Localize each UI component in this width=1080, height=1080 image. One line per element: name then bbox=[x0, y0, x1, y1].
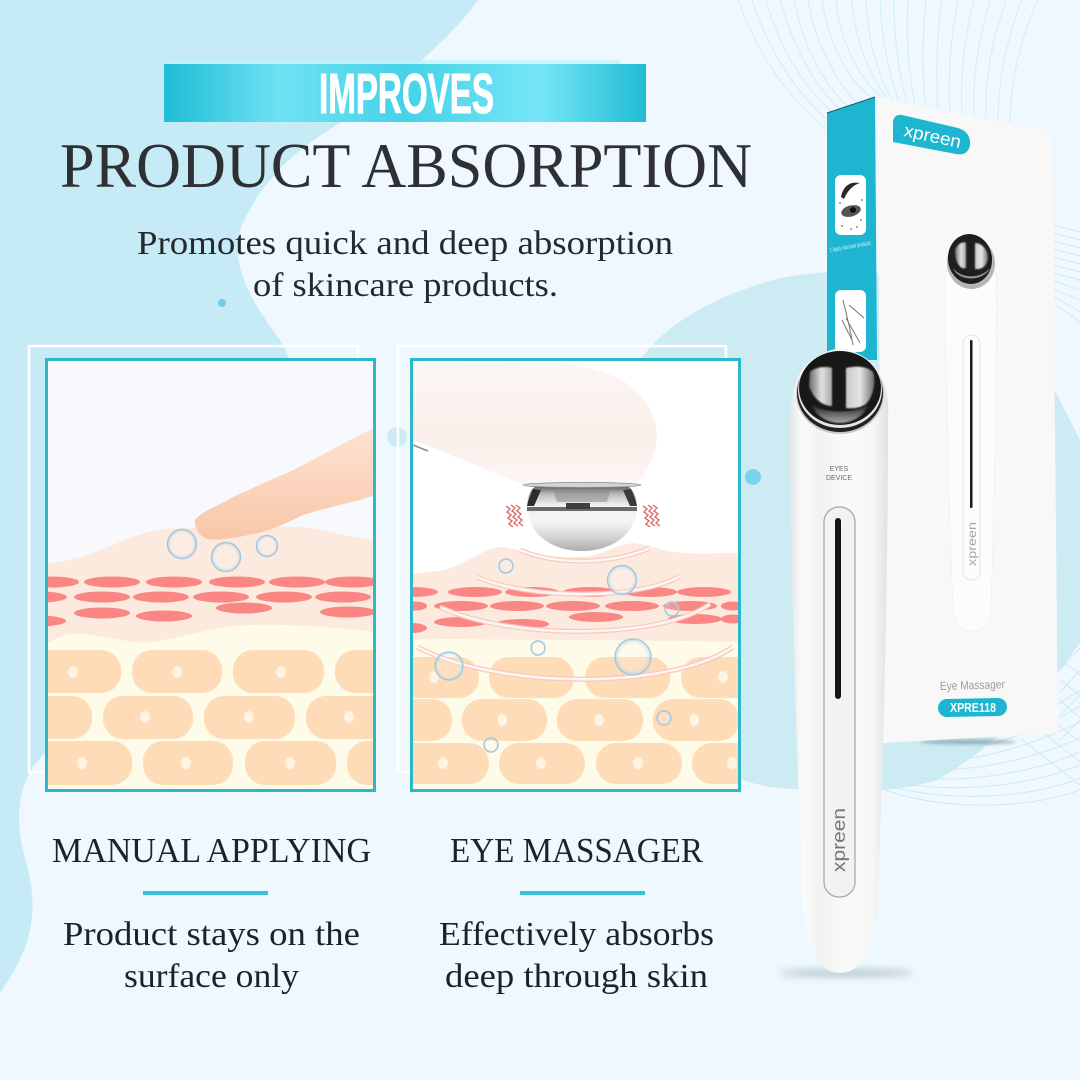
caption: manual applying: Product stays on the bbox=[63, 916, 360, 953]
slot panel bbox=[824, 507, 855, 897]
device metal head bbox=[523, 482, 641, 551]
black slot bbox=[835, 518, 841, 699]
small device on box bbox=[944, 231, 998, 631]
caption: manual applying: surface only bbox=[124, 958, 299, 995]
caption: eye massager bbox=[439, 831, 714, 995]
line pattern: lower right mesh bbox=[885, 648, 1080, 805]
red cells bbox=[386, 587, 745, 633]
water bubbles bbox=[435, 559, 679, 752]
device metal head bbox=[796, 351, 884, 434]
skin layer: dermis bbox=[45, 625, 376, 792]
skin layer: dermis bbox=[410, 639, 741, 792]
box label: eye massager: Eye Massager bbox=[940, 677, 1005, 693]
heading banner: improves bbox=[164, 60, 646, 126]
logo: xpreen: xpreen bbox=[902, 120, 963, 152]
device handle bbox=[405, 362, 657, 485]
main device shadow bbox=[778, 970, 914, 976]
box label: model pill bbox=[938, 698, 1007, 717]
main device bbox=[790, 348, 888, 973]
cell nuclei bbox=[429, 671, 737, 769]
heading banner: improves: IMPROVES bbox=[319, 62, 494, 126]
background dots bbox=[218, 299, 761, 485]
fat cells bbox=[48, 650, 373, 785]
finger bbox=[195, 427, 376, 540]
vibration waves bbox=[417, 548, 733, 679]
cell nuclei bbox=[68, 666, 354, 769]
line pattern: right upper mesh bbox=[1054, 225, 1080, 322]
background blob: left bbox=[0, 0, 478, 993]
background blob: right bbox=[620, 272, 1080, 791]
vibration marks bbox=[506, 505, 660, 527]
water bubbles bbox=[168, 530, 278, 572]
spine caption: 1.Apply skincare products bbox=[829, 241, 872, 254]
small device on box: xpreen bbox=[965, 522, 979, 566]
label: eyes device bbox=[826, 466, 852, 482]
line pattern: top right fan bbox=[738, 0, 1038, 132]
brand: xpreen: xpreen bbox=[829, 808, 849, 872]
panel border bbox=[46, 360, 374, 790]
box front bbox=[877, 97, 1058, 743]
skin layer: epidermis bbox=[45, 527, 376, 650]
panel border bbox=[412, 360, 740, 790]
subtitle: Promotes quick and deep absorption bbox=[137, 225, 673, 262]
device body bbox=[790, 348, 888, 973]
box spine bbox=[827, 97, 877, 360]
caption: manual applying: MANUAL APPLYING bbox=[52, 831, 371, 870]
red cells bbox=[48, 576, 373, 626]
product box bbox=[827, 97, 1058, 744]
caption: eye massager: EYE MASSAGER bbox=[450, 831, 704, 870]
box label: model pill: XPRE118 bbox=[950, 700, 996, 715]
subtitle: of skincare products. bbox=[253, 267, 558, 304]
spine icon: eye bbox=[835, 175, 866, 235]
spine icon: hand bbox=[835, 290, 866, 352]
panel frame: left offset bbox=[29, 346, 358, 772]
skin layer: epidermis bbox=[410, 543, 741, 650]
panel frame: right offset bbox=[398, 346, 726, 772]
logo: xpreen bbox=[893, 115, 970, 154]
panel: manual applying illustration bbox=[45, 358, 376, 792]
subtitle bbox=[137, 225, 673, 304]
label: eyes device: EYES bbox=[830, 466, 849, 473]
title: PRODUCT ABSORPTION bbox=[60, 130, 752, 201]
caption: manual applying bbox=[52, 831, 371, 995]
caption: eye massager: deep through skin bbox=[445, 958, 708, 995]
caption: eye massager: Effectively absorbs bbox=[439, 916, 714, 953]
label: eyes device: DEVICE bbox=[826, 475, 852, 482]
fat cells bbox=[413, 657, 738, 784]
panel: eye massager illustration bbox=[410, 358, 741, 792]
